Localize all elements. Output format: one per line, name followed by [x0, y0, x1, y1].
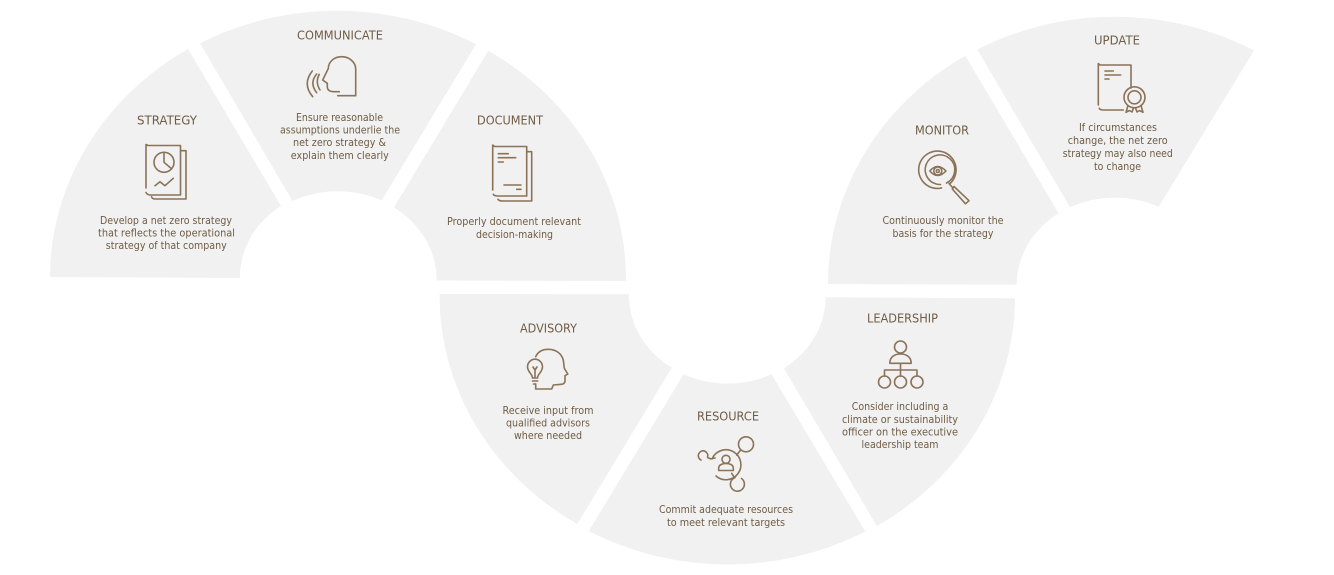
icon: documents	[493, 145, 532, 201]
text: strategy description: strategy of that company	[106, 239, 227, 252]
panel: update	[977, 17, 1254, 207]
segment shape: leadership	[784, 297, 1015, 526]
text: advisory description: Receive input from	[502, 404, 594, 417]
icon: connected person network	[698, 437, 754, 491]
text: advisory description: where needed	[514, 429, 582, 442]
heading: communicate: COMMUNICATE	[297, 28, 383, 42]
text: monitor description	[882, 214, 1004, 240]
text: communicate description: Ensure reasonable	[296, 111, 383, 124]
text: advisory description: qualified advisors	[506, 416, 590, 430]
icon: report with pie chart	[146, 144, 186, 199]
text: strategy description: Develop a net zero strategy	[100, 214, 233, 227]
text: monitor description: basis for the strategy	[892, 227, 994, 240]
text: communicate description	[280, 111, 400, 162]
text: update description: If circumstances	[1079, 121, 1157, 134]
panel: strategy	[50, 49, 281, 278]
segment shape: monitor	[828, 56, 1059, 285]
text: communicate description: assumptions underlie the	[280, 124, 400, 136]
text: communicate description: explain them clearly	[291, 149, 389, 162]
heading: leadership: LEADERSHIP	[867, 310, 938, 326]
icon: magnifier with eye	[919, 151, 969, 204]
panel: communicate	[200, 11, 476, 201]
heading: resource: RESOURCE	[697, 408, 759, 424]
text: monitor description: Continuously monitor the	[882, 214, 1004, 227]
text: resource description: to meet relevant targets	[667, 516, 785, 529]
text: leadership description: leadership team	[862, 438, 938, 451]
text: leadership description: climate or sustainability	[842, 413, 959, 426]
text: resource description: Commit adequate resources	[659, 503, 793, 516]
panel: monitor	[828, 56, 1059, 285]
heading: strategy: STRATEGY	[137, 112, 197, 128]
panel: advisory	[440, 294, 672, 524]
text: leadership description	[842, 400, 959, 451]
panel: leadership	[784, 297, 1015, 526]
heading: advisory: ADVISORY	[520, 320, 577, 336]
segment shape: communicate	[200, 11, 476, 201]
segment shape: advisory	[440, 294, 672, 524]
text: leadership description: Consider including a	[852, 400, 948, 413]
text: document description: Properly document relevant	[447, 215, 581, 228]
icon: organisation chart	[878, 341, 923, 388]
panel: document	[394, 51, 626, 281]
heading: document: DOCUMENT	[477, 112, 543, 128]
text: leadership description: officer on the executive	[842, 426, 958, 438]
text: update description: change, the net zero	[1068, 134, 1168, 147]
text: resource description	[659, 503, 793, 529]
text: communicate description: net zero strategy &	[293, 136, 387, 149]
text: update description: strategy may also need	[1063, 147, 1173, 160]
icon: head with light bulb	[528, 349, 568, 389]
heading: monitor: MONITOR	[915, 122, 969, 138]
text: update description: to change	[1094, 160, 1141, 173]
text: document description: decision-making	[476, 228, 553, 241]
heading: update: UPDATE	[1094, 32, 1140, 48]
segment shape: update	[977, 17, 1254, 207]
text: strategy description	[98, 214, 235, 252]
segment shape: resource	[589, 374, 865, 564]
segment shape: strategy	[50, 49, 281, 278]
icon: speaking head	[307, 57, 356, 97]
text: strategy description: that reflects the operational	[98, 226, 235, 240]
text: advisory description	[502, 404, 594, 442]
icon: certificate with rosette	[1098, 64, 1145, 112]
text: update description	[1063, 121, 1173, 173]
panel: resource	[589, 374, 865, 564]
segment shape: document	[394, 51, 626, 281]
text: document description	[447, 215, 581, 241]
